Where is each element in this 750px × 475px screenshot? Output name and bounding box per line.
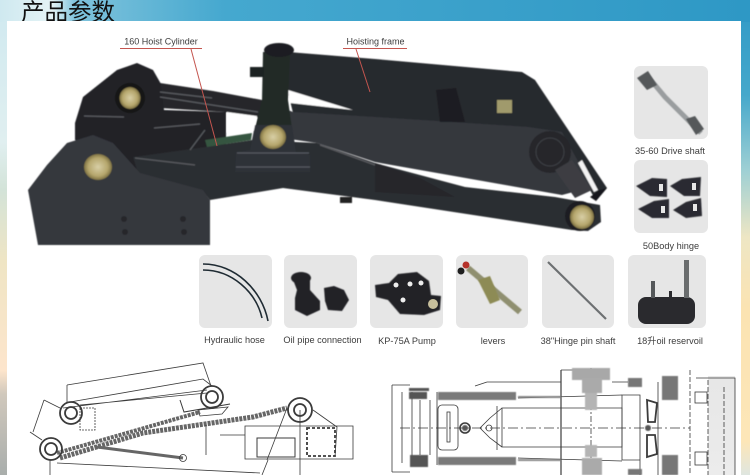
base plate	[28, 135, 210, 245]
callout: Hoisting frame: Hoisting frame	[346, 36, 405, 46]
side view technical drawing	[30, 363, 353, 475]
part: body hinge: 50Body hinge	[643, 241, 699, 251]
top view technical drawing	[392, 368, 735, 475]
callout: 160 Hoist Cylinder	[120, 36, 217, 146]
rear hinge block	[75, 63, 226, 173]
window cutout	[227, 112, 257, 132]
part: oil pipe connection	[283, 255, 362, 345]
part: KP-75A pump	[370, 255, 443, 346]
callout: Hoisting frame	[343, 36, 407, 92]
part: hinge pin shaft	[541, 255, 616, 346]
right drum	[529, 131, 571, 173]
mount	[235, 125, 310, 172]
fitting	[497, 100, 512, 113]
part: hydraulic hose: Hydraulic hose	[204, 335, 265, 345]
lower boom	[133, 140, 601, 231]
part: oil reservoir	[628, 255, 706, 346]
part: levers	[456, 255, 528, 346]
part: hinge pin shaft: 38"Hinge pin shaft	[541, 336, 616, 346]
part: drive shaft: 35-60 Drive shaft	[635, 146, 705, 156]
callout: 160 Hoist Cylinder: 160 Hoist Cylinder	[124, 36, 198, 46]
part: KP-75A pump: KP-75A Pump	[378, 336, 436, 346]
vertical tube	[255, 52, 292, 128]
hoisting frame lower panel	[262, 100, 592, 195]
part: levers: levers	[481, 336, 506, 346]
part: drive shaft	[634, 66, 708, 156]
hoist cylinder	[205, 133, 252, 147]
cylinder housing highlights	[84, 92, 375, 165]
part: body hinge	[634, 160, 708, 251]
part: oil reservoir: 18升oil reservoil	[637, 336, 703, 346]
part: oil pipe connection: Oil pipe connection	[283, 335, 362, 345]
hoist machine photo	[28, 43, 607, 245]
brass pins	[115, 83, 145, 113]
hoisting frame upper beam	[287, 52, 607, 201]
part: hydraulic hose	[199, 255, 272, 345]
upper arm	[160, 83, 262, 118]
